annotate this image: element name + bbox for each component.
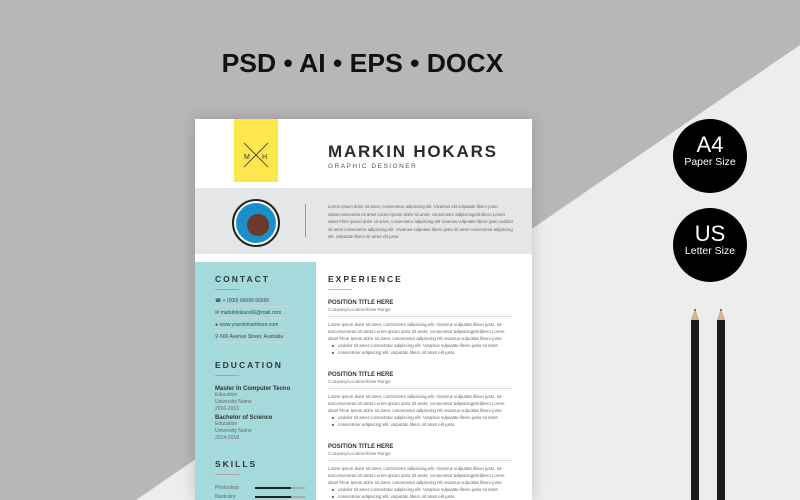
left sidebar: ● www.yourdomainhere.com bbox=[215, 322, 278, 328]
name heading: MARKIN HOKARS bbox=[328, 142, 498, 161]
experience section: Company/Location/Date Range bbox=[328, 307, 391, 312]
experience section: EXPERIENCE bbox=[328, 274, 403, 284]
education: EDUCATION bbox=[215, 360, 283, 370]
left sidebar: ☎ + (000) 66666 66666 bbox=[215, 298, 269, 304]
experience section bbox=[328, 274, 512, 499]
left sidebar: Master In Computer Tecno bbox=[215, 386, 290, 392]
contact: CONTACT bbox=[215, 274, 270, 284]
experience section: usdolor sit amet consectetur adipiscing elit. Vivamus vulputate libero justo sit amet bbox=[338, 343, 498, 348]
left sidebar: ⚲ 666 Avenue Street, Australia bbox=[215, 334, 283, 340]
left sidebar: Illustrator bbox=[215, 494, 236, 500]
pencils bbox=[691, 308, 725, 500]
title: PSD • AI • EPS • DOCX bbox=[222, 48, 503, 78]
experience section: Lorem ipsum dolor sit amet, consectetur adipiscing elit. Vivamus vulputate libero justo. sit amconsectetur.sit amet Lorem ipsum dolor sit amet, consectetur adipiscingelit.libero Lorem sitset Flore ipsum dolor sit amet, consectetur adipiscing elit vivamus.vulputate libero justo bbox=[328, 466, 504, 485]
skills: SKILLS bbox=[215, 459, 257, 469]
experience section: consectetur adipiscing elit. vulputate libero sit amet elit justo bbox=[338, 422, 454, 427]
badge: A4 paper size: Paper Size bbox=[684, 156, 736, 168]
resume document bbox=[195, 119, 532, 500]
photo bbox=[232, 199, 280, 247]
left sidebar: Education bbox=[215, 421, 237, 427]
left sidebar bbox=[195, 262, 316, 500]
monogram logo: M bbox=[244, 154, 250, 161]
experience section: POSITION TITLE HERE bbox=[328, 300, 393, 306]
experience section: Lorem ipsum dolor sit amet, consectetur adipiscing elit. Vivamus vulputate libero justo. sit amconsectetur.sit amet Lorem ipsum dolor sit amet, consectetur adipiscingelit.libero Lorem sitset Flore ipsum dolor sit amet, consectetur adipiscing elit vivamus.vulputate libero justo bbox=[328, 394, 504, 413]
badge: US letter size bbox=[673, 208, 747, 282]
experience section: POSITION TITLE HERE bbox=[328, 444, 393, 450]
experience section: POSITION TITLE HERE bbox=[328, 372, 393, 378]
experience section: consectetur adipiscing elit. vulputate libero sit amet elit justo bbox=[338, 494, 454, 499]
left sidebar: University Name bbox=[215, 399, 252, 405]
experience section: consectetur adipiscing elit. vulputate libero sit amet elit justo bbox=[338, 350, 454, 355]
badge: US letter size: US bbox=[695, 221, 725, 246]
left sidebar: Photoshop bbox=[215, 485, 239, 491]
badge: A4 paper size bbox=[673, 119, 747, 193]
badge: US letter size: Letter Size bbox=[685, 245, 735, 257]
profile band bbox=[195, 188, 532, 254]
experience section: Company/Location/Date Range bbox=[328, 379, 391, 384]
experience section: Lorem ipsum dolor sit amet, consectetur adipiscing elit. Vivamus vulputate libero justo. sit amconsectetur.sit amet Lorem ipsum dolor sit amet, consectetur adipiscingelit.libero Lorem sitset Flore ipsum dolor sit amet, consectetur adipiscing elit vivamus.vulputate libero justo bbox=[328, 322, 504, 341]
left sidebar: Education bbox=[215, 392, 237, 398]
monogram logo: H bbox=[262, 154, 267, 161]
experience section: usdolor sit amet consectetur adipiscing elit. Vivamus vulputate libero justo sit amet bbox=[338, 415, 498, 420]
job title: GRAPHIC DESIGNER bbox=[328, 163, 417, 170]
profile text: Lorem ipsum dolor sit amet, consectetur adipiscing elit. Vivamus elit vulputate libero justo. sitamconsectetur.sit amet Lorem ipsum dolor sit amet, consectetur adipiscingelit.libero Lorem sitset Flore ipsum dolor sit amet, consectetur adipiscing elit vivamus.vulputate libero justo usdolor sit amet consectetur adipiscing elit. Vivamus vulputate libero justo sit amet consectetur adipiscing elit. vulputate libero sit amet elit justo. bbox=[328, 204, 513, 239]
monogram logo bbox=[234, 119, 278, 182]
left sidebar: 2014-2018 bbox=[215, 435, 239, 441]
badge: A4 paper size: A4 bbox=[697, 132, 723, 157]
left sidebar: University Name bbox=[215, 428, 252, 434]
left sidebar: 2010-2013 bbox=[215, 406, 239, 412]
experience section: usdolor sit amet consectetur adipiscing elit. Vivamus vulputate libero justo sit amet bbox=[338, 487, 498, 492]
experience section: Company/Location/Date Range bbox=[328, 451, 391, 456]
left sidebar: ✉ markinhokars66@mail.com bbox=[215, 310, 281, 316]
left sidebar: Bachelor of Science bbox=[215, 415, 272, 421]
